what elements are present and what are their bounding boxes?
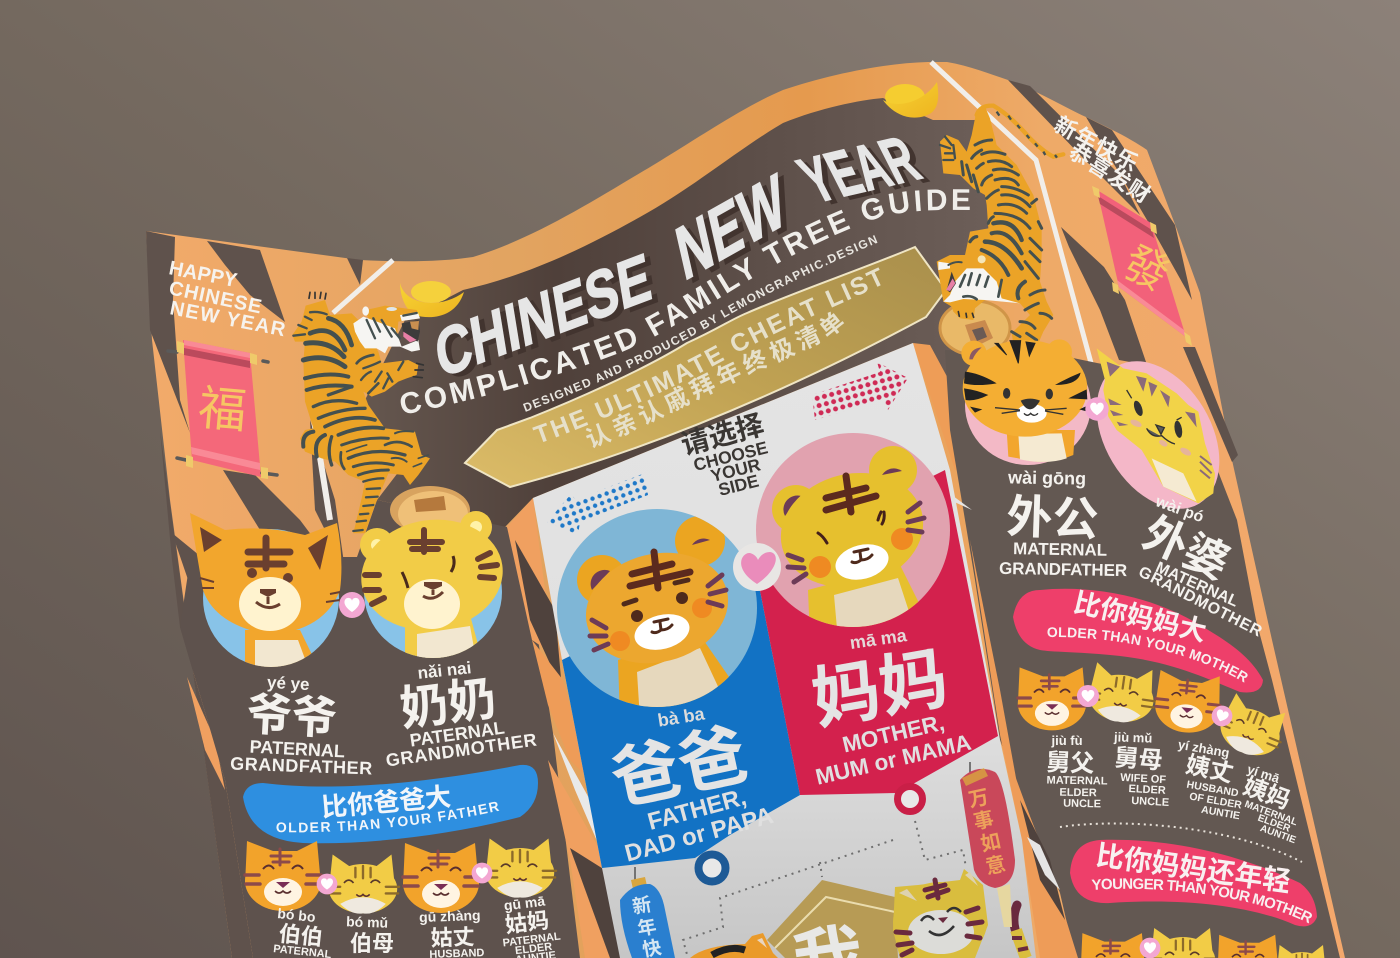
avatar: waipo — [1071, 339, 1245, 531]
title: chinese new year: YEAR — [788, 124, 931, 216]
left scroll with fu: 福 — [196, 382, 249, 439]
left happy new year greeting — [167, 257, 288, 341]
tiger left — [292, 292, 430, 533]
orange stripes beside white panel, right — [945, 490, 1078, 958]
relatives: left: ELDER — [514, 941, 553, 957]
labels: nainai: 奶奶 — [397, 672, 499, 737]
relatives: right: ELDER — [1059, 787, 1097, 799]
mother labels: mā ma — [849, 625, 909, 653]
choose your side text: YOUR — [709, 454, 763, 486]
relatives: left: bó mǔ — [346, 913, 388, 931]
subtitle: COMPLICATED FAMILY TREE GUIDE — [400, 189, 970, 414]
orange stripes beside white panel, left — [507, 498, 625, 958]
labels: waipo — [1136, 493, 1265, 641]
mother labels: 妈妈 — [806, 640, 954, 739]
ring: blue — [698, 854, 726, 882]
pill: older than mother: OLDER THAN YOUR MOTHER — [1047, 627, 1248, 683]
tiger cub bottom right — [893, 869, 1028, 958]
labels: yeye: GRANDFATHER — [230, 754, 373, 778]
pill: younger than mother: 比你妈妈还年轻 — [1094, 840, 1293, 898]
red lantern: 如 — [978, 829, 1003, 856]
red lantern: 意 — [983, 851, 1008, 879]
mother labels: MOTHER, — [840, 710, 947, 758]
choose your side text: 请选择 — [678, 409, 767, 461]
heart left — [339, 592, 365, 618]
white frame lines — [312, 62, 1094, 520]
gold banner — [463, 246, 942, 488]
mother labels — [806, 625, 973, 790]
pill: older than father — [243, 764, 538, 844]
left happy new year greeting: NEW YEAR — [168, 297, 288, 341]
blue father panel — [562, 565, 800, 868]
gold banner: THE ULTIMATE CHEAT LIST — [532, 267, 881, 442]
central white panel — [533, 343, 1036, 958]
coin left — [390, 486, 470, 537]
labels: yeye: 爷爷 — [246, 689, 338, 744]
blue lantern: 新 — [631, 894, 653, 919]
left happy new year greeting: CHINESE — [167, 277, 263, 318]
title: chinese new year — [430, 124, 931, 392]
relatives: right: OF ELDER — [1188, 791, 1243, 812]
left happy new year greeting: HAPPY — [167, 257, 240, 292]
pill: older than mother: 比你妈妈大 — [1071, 587, 1209, 647]
relatives: right: 姨妈 — [1239, 773, 1294, 815]
labels: yeye — [230, 673, 373, 778]
relatives: right — [1046, 729, 1299, 846]
title: chinese new year: CHINESE — [430, 239, 656, 392]
blue lantern: 年 — [636, 915, 658, 941]
pill: older than mother — [1013, 587, 1263, 692]
avatar: yeye — [190, 513, 341, 667]
relatives: left: 姑丈 — [430, 924, 475, 951]
gold ingot right — [883, 82, 938, 118]
choose your side text: SIDE — [716, 471, 761, 500]
relatives: right: ELDER — [1128, 783, 1166, 797]
relatives: left: gū mā — [503, 893, 546, 913]
relatives: right: HUSBAND — [1186, 779, 1240, 800]
relatives: right: UNCLE — [1063, 798, 1101, 810]
relatives: right: MATERNAL — [1243, 799, 1299, 828]
relatives: right: AUNTIE — [1200, 804, 1241, 822]
orange strip right of the header — [913, 343, 975, 470]
relatives: right: yí zhàng — [1177, 737, 1231, 760]
relatives: right: MATERNAL — [1046, 774, 1108, 788]
relatives: right: jiù mǔ — [1113, 729, 1153, 746]
pill: older than father: OLDER THAN YOUR FATHER — [276, 802, 500, 832]
right brown column — [945, 350, 1340, 958]
father labels — [605, 703, 776, 868]
labels: waipo: 外婆 — [1136, 508, 1236, 589]
relatives: left: 姑妈 — [504, 907, 550, 938]
red lantern: 万 — [967, 786, 991, 812]
heart right — [1085, 397, 1109, 421]
avatar: mama tiger — [756, 433, 950, 640]
avatar: waigong — [961, 339, 1091, 465]
red mother panel — [755, 470, 998, 795]
father labels: DAD or PAPA — [622, 802, 776, 868]
relatives: left: 伯伯 — [278, 921, 324, 950]
right greeting: 恭喜发财 — [1064, 139, 1156, 209]
relatives: right: jiù fù — [1050, 733, 1083, 748]
labels: waigong: wài gōng — [1007, 467, 1086, 489]
relatives: right: 舅母 — [1114, 744, 1163, 775]
labels: nainai — [385, 658, 538, 771]
right scroll with fa: 發 — [1116, 237, 1176, 300]
father labels: FATHER, — [645, 784, 749, 836]
relatives: right: 姨丈 — [1183, 751, 1236, 788]
left stripes — [146, 231, 190, 433]
father labels: bà ba — [656, 703, 707, 731]
red lantern: 事 — [971, 807, 996, 834]
coin right — [940, 301, 1010, 355]
blue lantern — [620, 867, 675, 958]
cats row: right — [1018, 662, 1292, 765]
cats row: left — [245, 838, 556, 914]
relatives: left: PATERNAL — [502, 930, 562, 950]
relatives: right: WIFE OF — [1120, 772, 1167, 786]
tiger cub bottom left — [690, 933, 778, 958]
gold banner: 认亲认戚拜年终极清单 — [586, 312, 844, 448]
relatives: right: ELDER — [1256, 813, 1292, 835]
labels: waigong: MATERNAL — [1013, 539, 1107, 560]
labels: nainai: PATERNAL — [409, 718, 506, 751]
right greeting — [1050, 112, 1156, 209]
brown header panel — [365, 98, 1000, 527]
pill: older than father: 比你爸爸大 — [320, 781, 452, 823]
relatives: left: bó bo — [277, 905, 316, 925]
heart bubble — [733, 543, 781, 591]
labels: nainai: GRANDMOTHER — [385, 730, 538, 771]
right scroll with fa — [1092, 186, 1192, 346]
gold ingot left — [400, 281, 464, 317]
labels: waigong: 外公 — [1006, 490, 1099, 546]
labels: nainai: nǎi nai — [417, 658, 472, 683]
gold house: me — [767, 880, 898, 958]
dotted connectors — [683, 821, 966, 958]
labels: waipo: wài pó — [1152, 493, 1206, 526]
labels: waipo: GRANDMOTHER — [1136, 564, 1265, 641]
right stripes — [1008, 80, 1140, 215]
right greeting: 新年快乐 — [1050, 112, 1143, 177]
left scroll with fu — [168, 340, 277, 479]
labels: yeye: PATERNAL — [249, 737, 345, 761]
relatives: right: AUNTIE — [1258, 823, 1298, 846]
labels: waigong — [999, 467, 1127, 580]
labels: yeye: yé ye — [267, 673, 310, 694]
labels: waipo: MATERNAL — [1153, 559, 1241, 611]
relatives: left: 伯母 — [350, 931, 394, 956]
pill: younger than mother: YOUNGER THAN YOUR MOTHER — [1092, 878, 1312, 924]
mother labels: MUM or MAMA — [813, 730, 973, 790]
title: chinese new year: NEW — [669, 157, 792, 297]
avatar: nainai — [360, 511, 503, 658]
relatives: left: gū zhàng — [419, 907, 481, 925]
choose your side text: CHOOSE — [691, 437, 770, 475]
avatar: papa tiger — [557, 509, 757, 720]
choose your side text — [678, 409, 770, 500]
relatives: right: yí mā — [1245, 761, 1282, 786]
relatives: right: 舅父 — [1046, 749, 1095, 778]
tiger right — [937, 106, 1063, 343]
cats row: right bottom — [1081, 928, 1329, 958]
credit line: DESIGNED AND PRODUCED BY LEMONGRAPHIC.DESIGN — [523, 235, 878, 412]
relatives: left — [273, 893, 562, 958]
labels: waigong: GRANDFATHER — [999, 559, 1127, 580]
relatives: right: UNCLE — [1131, 795, 1169, 809]
dotted arrow blue — [547, 473, 648, 535]
left brown column — [180, 500, 580, 958]
dotted arrow red — [812, 362, 908, 420]
father labels: 爸爸 — [605, 716, 754, 819]
pill: younger than mother — [1070, 840, 1317, 926]
ring: red — [898, 786, 922, 812]
red lantern — [960, 762, 1015, 927]
